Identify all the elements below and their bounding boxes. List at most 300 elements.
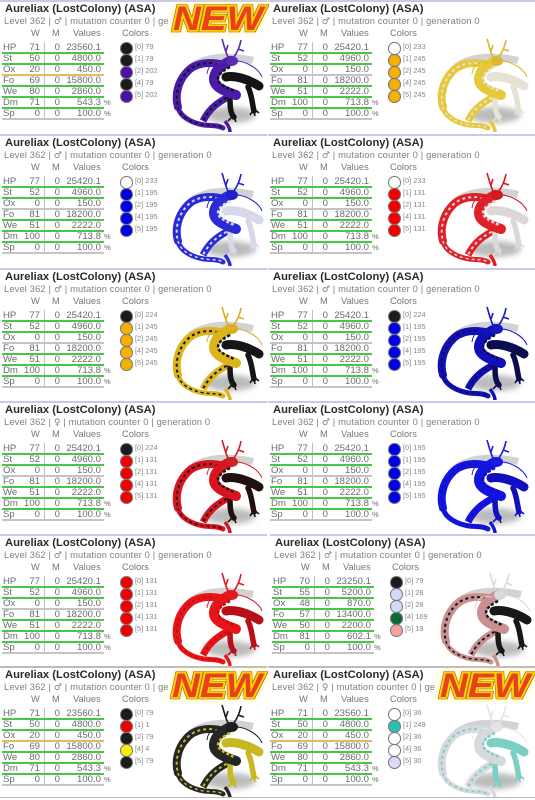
stats table: We <box>3 487 17 498</box>
stats table: 0 <box>55 64 60 75</box>
stats table: % <box>372 109 379 118</box>
stats table: 4960.0 <box>340 187 369 198</box>
stats table <box>270 310 379 388</box>
stats table: Dm <box>3 231 18 242</box>
stats table: 50 <box>297 719 308 730</box>
stats table: 81 <box>297 209 308 220</box>
table header: M <box>320 296 328 306</box>
stats table: Dm <box>3 498 18 509</box>
stats table: 0 <box>55 108 60 119</box>
stats table: Ox <box>273 598 285 609</box>
stats table <box>2 443 111 521</box>
stats table: 4960.0 <box>72 321 101 332</box>
stats table: 0 <box>35 774 40 785</box>
table header: Colors <box>390 162 417 172</box>
stats table <box>273 576 383 653</box>
color swatches: [5] 245 <box>403 90 426 99</box>
card 10: pink and green <box>270 534 535 666</box>
stats table: 20 <box>29 730 40 741</box>
stats table: Sp <box>3 642 15 653</box>
table header: Colors <box>122 162 149 172</box>
stats table: 0 <box>323 343 328 354</box>
color swatches: [1] 245 <box>135 322 158 331</box>
card 6: dark blue <box>268 268 535 400</box>
table header: W <box>31 162 40 172</box>
stats table: % <box>372 98 379 107</box>
table header: Values <box>341 694 369 704</box>
stats table: 0 <box>55 587 60 598</box>
stats table: 0 <box>323 64 328 75</box>
table header: Colors <box>122 28 149 38</box>
stats table: % <box>104 98 111 107</box>
stats table: % <box>104 243 111 252</box>
stats table: 100.0 <box>345 108 369 119</box>
stats table: 150.0 <box>345 332 369 343</box>
stats table: 4960.0 <box>340 454 369 465</box>
color swatches: [0] 79 <box>405 576 424 585</box>
stats table: 81 <box>29 476 40 487</box>
color swatches: [4] 245 <box>135 346 158 355</box>
stats table: 0 <box>55 209 60 220</box>
stats table: Ox <box>271 465 283 476</box>
stats table: 81 <box>299 631 310 642</box>
stats table: 0 <box>325 587 330 598</box>
stats table: 55 <box>299 587 310 598</box>
stats table: 25420.1 <box>334 42 369 53</box>
color swatches: [1] 249 <box>403 720 426 729</box>
stats table: 100.0 <box>77 376 101 387</box>
color swatches: [4] 36 <box>403 744 422 753</box>
table header: Colors <box>392 562 419 572</box>
stats table: 0 <box>55 741 60 752</box>
stats table: St <box>273 587 282 598</box>
stats table: 80 <box>297 752 308 763</box>
stats table: 0 <box>303 332 308 343</box>
table header: Values <box>341 429 369 439</box>
stats table: HP <box>3 443 16 454</box>
stats table: 0 <box>55 443 60 454</box>
stats table: Sp <box>3 509 15 520</box>
stats table: Ox <box>3 332 15 343</box>
color swatches <box>120 707 162 769</box>
level line: Level 362 | ♀ | mutation counter 0 | generation 0 <box>4 417 210 428</box>
color swatches: [1] 131 <box>135 588 158 597</box>
stats table: 0 <box>303 242 308 253</box>
stats table: 25420.1 <box>334 310 369 321</box>
stats table: Fo <box>3 209 14 220</box>
stats table: Fo <box>271 741 282 752</box>
stats table: Dm <box>271 763 286 774</box>
color swatches: [2] 245 <box>135 334 158 343</box>
stats table: 0 <box>55 719 60 730</box>
level line: Level 362 | ♂ | mutation counter 0 | generation 0 <box>272 284 480 295</box>
table header: Values <box>343 562 371 572</box>
table header: Values <box>73 694 101 704</box>
stats table: Fo <box>3 75 14 86</box>
color swatches: [1] 195 <box>135 188 158 197</box>
icon: dragon <box>433 703 533 799</box>
stats table: We <box>271 354 285 365</box>
stats table: 23560.1 <box>66 42 101 53</box>
stats table: St <box>271 53 280 64</box>
table header: W <box>299 429 308 439</box>
stats table: 0 <box>323 242 328 253</box>
stats table: Ox <box>3 598 15 609</box>
table header <box>270 561 430 573</box>
table header: M <box>320 429 328 439</box>
stats table: % <box>104 377 111 386</box>
stats table: 100.0 <box>77 642 101 653</box>
stats table: 0 <box>323 443 328 454</box>
stats table: 0 <box>323 332 328 343</box>
color swatches: [5] 202 <box>135 90 158 99</box>
color swatches <box>388 42 426 103</box>
card 5: gold and black <box>0 268 267 400</box>
stats table: 81 <box>297 476 308 487</box>
stats table: Fo <box>271 75 282 86</box>
stats table: 150.0 <box>345 465 369 476</box>
stats table: 0 <box>323 774 328 785</box>
stats table: 52 <box>29 321 40 332</box>
bottom rule <box>0 797 535 798</box>
stats table: 0 <box>323 86 328 97</box>
table header: Values <box>341 296 369 306</box>
color swatches: [2] 195 <box>403 334 426 343</box>
stats table: HP <box>3 176 16 187</box>
color swatches: [5] 195 <box>135 224 158 233</box>
color swatches: [0] 233 <box>403 176 426 185</box>
level line: Level 362 | ♂ | mutation counter 0 | generation 0 <box>272 417 480 428</box>
stats table: 150.0 <box>77 598 101 609</box>
stats table: 0 <box>55 631 60 642</box>
stats table: 23250.1 <box>336 576 371 587</box>
stats table <box>2 42 111 120</box>
table header: W <box>31 562 40 572</box>
color swatches: [5] 195 <box>403 491 426 500</box>
stats table: We <box>271 752 285 763</box>
stats table: 0 <box>55 752 60 763</box>
table header: Values <box>73 562 101 572</box>
stats table: 0 <box>325 642 330 653</box>
card 1: purple <box>0 0 267 132</box>
table header <box>31 429 149 439</box>
stats table: % <box>372 232 379 241</box>
stats table: We <box>273 620 287 631</box>
stats table: 2222.0 <box>340 220 369 231</box>
stats table: 0 <box>323 454 328 465</box>
stats table: 2222.0 <box>340 354 369 365</box>
color swatches: [0] 224 <box>135 310 158 319</box>
stats table: % <box>372 499 379 508</box>
title: Aureliax (LostColony) (ASA) <box>5 404 155 416</box>
stats table: HP <box>3 42 16 53</box>
stats table: 0 <box>303 774 308 785</box>
table header: Colors <box>122 429 149 439</box>
stats table <box>270 176 379 254</box>
table header: Values <box>73 296 101 306</box>
stats table: 77 <box>29 443 40 454</box>
stats table: Fo <box>3 476 14 487</box>
stats table: 0 <box>303 108 308 119</box>
stats table: Sp <box>271 509 283 520</box>
title: Aureliax (LostColony) (ASA) <box>273 3 423 15</box>
stats table: 0 <box>55 198 60 209</box>
icon: dragon <box>438 306 528 400</box>
stats table: Sp <box>273 642 285 653</box>
stats table: % <box>372 377 379 386</box>
stats table: 2222.0 <box>72 220 101 231</box>
title: Aureliax (LostColony) (ASA) <box>5 3 155 15</box>
color swatches: [0] 224 <box>403 310 426 319</box>
stats table: 100.0 <box>345 376 369 387</box>
stats table: 543.3 <box>77 97 101 108</box>
color swatches: [2] 131 <box>135 467 158 476</box>
stats table: Fo <box>271 343 282 354</box>
stats table: 25420.1 <box>334 176 369 187</box>
title: Aureliax (LostColony) (ASA) <box>5 137 155 149</box>
color swatches: [4] 131 <box>135 479 158 488</box>
stats table: 0 <box>55 376 60 387</box>
color swatches: [5] 79 <box>135 756 154 765</box>
stats table: 100.0 <box>347 642 371 653</box>
stats table: % <box>104 499 111 508</box>
stats table: 0 <box>323 376 328 387</box>
stats table: 50 <box>299 620 310 631</box>
stats table: 0 <box>55 642 60 653</box>
color swatches: [4] 195 <box>403 479 426 488</box>
stats table: 0 <box>323 752 328 763</box>
table header: Colors <box>390 694 417 704</box>
stats table: 51 <box>297 487 308 498</box>
stats table: 71 <box>297 708 308 719</box>
stats table: 0 <box>35 108 40 119</box>
stats table: 25420.1 <box>66 310 101 321</box>
stats table: 150.0 <box>77 465 101 476</box>
table header <box>268 428 428 440</box>
stats table: 100.0 <box>345 774 369 785</box>
stats table: 51 <box>29 620 40 631</box>
stats table: % <box>104 510 111 519</box>
stats table: Fo <box>273 609 284 620</box>
stats table: 0 <box>55 53 60 64</box>
stats table: 81 <box>29 343 40 354</box>
stats table: HP <box>273 576 286 587</box>
stats table: 0 <box>325 620 330 631</box>
color swatches: [2] 245 <box>403 66 426 75</box>
icon: dragon <box>172 38 264 132</box>
stats table: 0 <box>323 108 328 119</box>
stats table: 0 <box>55 620 60 631</box>
stats table: We <box>3 86 17 97</box>
stats table: 0 <box>323 176 328 187</box>
stats table: 0 <box>55 231 60 242</box>
stats table: 5200.0 <box>342 587 371 598</box>
color swatches <box>388 176 426 237</box>
stats table: 0 <box>35 598 40 609</box>
stats table: St <box>3 454 12 465</box>
stats table: 48 <box>299 598 310 609</box>
table header <box>299 28 417 38</box>
stats table: 51 <box>297 220 308 231</box>
stats table: 23560.1 <box>334 708 369 719</box>
stats table: 77 <box>297 176 308 187</box>
stats table <box>270 42 379 120</box>
stats table: 100 <box>292 231 308 242</box>
stats table: 100.0 <box>345 242 369 253</box>
stats table: Ox <box>271 64 283 75</box>
title: Aureliax (LostColony) (ASA) <box>273 137 423 149</box>
stats table: Dm <box>271 498 286 509</box>
stats table: 0 <box>303 198 308 209</box>
stats table: 0 <box>323 354 328 365</box>
stats table: Ox <box>271 332 283 343</box>
card 11: black with red and yellow <box>0 666 265 798</box>
table header: W <box>31 28 40 38</box>
stats table: 77 <box>297 42 308 53</box>
color swatches: [0] 224 <box>135 443 158 452</box>
stats table: 0 <box>55 454 60 465</box>
stats table: Dm <box>3 631 18 642</box>
stats table: Sp <box>271 774 283 785</box>
stats table: 4960.0 <box>340 53 369 64</box>
stats table: 77 <box>297 443 308 454</box>
stats table: 0 <box>303 509 308 520</box>
table header: W <box>299 162 308 172</box>
stats table: 0 <box>55 354 60 365</box>
stats table: 543.3 <box>77 763 101 774</box>
table header: W <box>299 694 308 704</box>
color swatches: [2] 79 <box>135 732 154 741</box>
color swatches: [1] 131 <box>403 188 426 197</box>
stats table: 77 <box>29 310 40 321</box>
table header: Colors <box>390 296 417 306</box>
stats table: We <box>271 220 285 231</box>
stats table: 52 <box>29 454 40 465</box>
stats table: 0 <box>323 487 328 498</box>
color swatches: [5] 195 <box>403 358 426 367</box>
stats table: 0 <box>323 730 328 741</box>
color swatches: [1] 131 <box>135 455 158 464</box>
stats table: 71 <box>29 708 40 719</box>
level line: Level 362 | ♂ | mutation counter 0 | ge <box>4 16 169 27</box>
color swatches <box>120 575 162 637</box>
stats table: Dm <box>271 365 286 376</box>
stats table: Dm <box>271 231 286 242</box>
stats table: % <box>104 632 111 641</box>
stats table: 100.0 <box>345 509 369 520</box>
stats table: 69 <box>29 741 40 752</box>
stats table: 69 <box>29 75 40 86</box>
stats table: 51 <box>297 86 308 97</box>
stats table: 0 <box>55 242 60 253</box>
stats table: 0 <box>323 310 328 321</box>
color swatches: [0] 131 <box>135 576 158 585</box>
stats table: 0 <box>55 332 60 343</box>
stats table: 0 <box>323 763 328 774</box>
color swatches: [5] 245 <box>135 358 158 367</box>
stats table: 0 <box>55 509 60 520</box>
title: Aureliax (LostColony) (ASA) <box>273 669 423 681</box>
stats table: 4960.0 <box>72 454 101 465</box>
stats table: 713.8 <box>77 231 101 242</box>
stats table: 0 <box>323 708 328 719</box>
stats table: % <box>104 232 111 241</box>
title: Aureliax (LostColony) (ASA) <box>273 271 423 283</box>
stats table: 13400.0 <box>336 609 371 620</box>
stats table: 450.0 <box>345 730 369 741</box>
level line: Level 362 | ♂ | mutation counter 0 | generation 0 <box>272 150 480 161</box>
stats table: HP <box>3 576 16 587</box>
color swatches: [2] 195 <box>403 467 426 476</box>
stats table: % <box>372 243 379 252</box>
stats table: 4960.0 <box>72 187 101 198</box>
NEW badge top: NEW <box>173 0 266 38</box>
table header: Values <box>73 429 101 439</box>
stats table: 0 <box>325 609 330 620</box>
stats table: St <box>3 187 12 198</box>
stats table: 77 <box>297 310 308 321</box>
stats table: 57 <box>299 609 310 620</box>
stats table: Fo <box>3 343 14 354</box>
color swatches: [5] 131 <box>403 224 426 233</box>
table header: M <box>320 694 328 704</box>
stats table: 18200.0 <box>334 75 369 86</box>
stats table: 4800.0 <box>72 719 101 730</box>
color swatches: [1] 28 <box>405 588 424 597</box>
color swatches: [5] 19 <box>405 624 424 633</box>
stats table: 0 <box>55 75 60 86</box>
color swatches <box>120 42 158 103</box>
color swatches: [0] 36 <box>403 708 422 717</box>
stats table: 71 <box>297 763 308 774</box>
stats table: 52 <box>297 454 308 465</box>
stats table: 52 <box>297 321 308 332</box>
stats table: 2222.0 <box>340 86 369 97</box>
color swatches: [0] 195 <box>403 443 426 452</box>
stats table: 51 <box>29 220 40 231</box>
stats table: 100.0 <box>77 774 101 785</box>
stats table: Sp <box>271 376 283 387</box>
title: Aureliax (LostColony) (ASA) <box>5 537 155 549</box>
color swatches: [5] 30 <box>403 756 422 765</box>
color swatches: [4] 131 <box>403 212 426 221</box>
stats table: Fo <box>271 209 282 220</box>
stats table: 602.1 <box>347 631 371 642</box>
stats table: 51 <box>29 354 40 365</box>
stats table: 77 <box>29 176 40 187</box>
stats table: 81 <box>29 209 40 220</box>
stats table: HP <box>271 708 284 719</box>
stats table: 0 <box>55 220 60 231</box>
stats table: 50 <box>29 53 40 64</box>
stats table: Sp <box>271 108 283 119</box>
title: Aureliax (LostColony) (ASA) <box>273 404 423 416</box>
table header <box>0 561 160 573</box>
stats table: St <box>271 187 280 198</box>
stats table: % <box>372 764 379 773</box>
stats table: 713.8 <box>345 231 369 242</box>
stats table: Sp <box>3 774 15 785</box>
stats table: 0 <box>55 176 60 187</box>
color swatches <box>120 176 158 237</box>
stats table: 4960.0 <box>72 587 101 598</box>
stats table: 713.8 <box>77 631 101 642</box>
color swatches <box>120 442 162 504</box>
table header: W <box>31 296 40 306</box>
stats table: % <box>374 643 381 652</box>
stats table: HP <box>271 42 284 53</box>
table header <box>31 162 149 172</box>
